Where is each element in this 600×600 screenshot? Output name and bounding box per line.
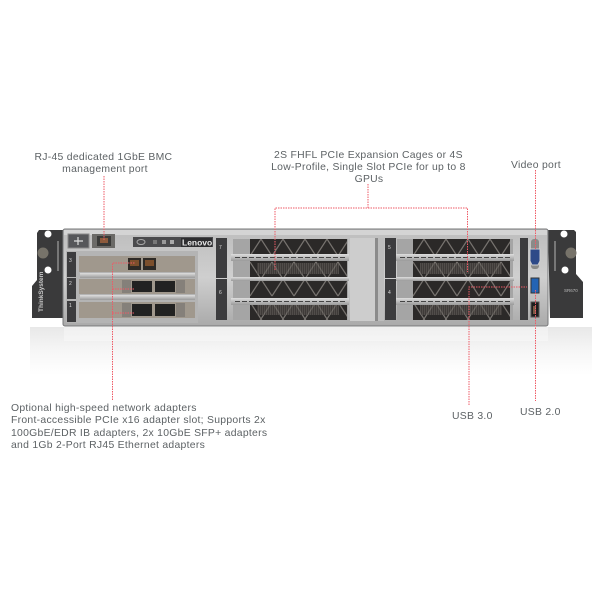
lenovo badge: Lenovo <box>182 238 212 248</box>
chassis body <box>63 229 548 326</box>
centre blank panel <box>350 238 384 321</box>
left rack ear <box>32 230 63 318</box>
label: network adapters: 100GbE/EDR IB adapters, 2x 10GbE SFP+ adapters <box>11 428 267 439</box>
number strip 5 and 4: 4 <box>388 290 391 296</box>
label: RJ-45 port: RJ-45 dedicated 1GbE BMC <box>34 152 173 163</box>
number strip 5 and 4: 5 <box>388 245 391 251</box>
number strip 7 and 6 <box>216 238 227 320</box>
server front panel <box>32 229 583 326</box>
left rack ear: ThinkSystem <box>38 271 45 312</box>
USB 2.0 port <box>531 302 539 317</box>
adapter slots: 1 <box>69 303 72 309</box>
number strip 7 and 6: 7 <box>219 245 222 251</box>
adapter card 2 <box>79 279 195 294</box>
IO strip <box>520 238 540 320</box>
label: PCIe expansion cages: 2S FHFL PCIe Expansion Cages or 4S <box>274 150 463 161</box>
adapter slots: 3 <box>69 258 72 264</box>
adapter card 3 <box>79 256 195 272</box>
number strip 7 and 6: 6 <box>219 290 222 296</box>
number strip 5 and 4 <box>385 238 396 320</box>
label: RJ-45 port: management port <box>62 164 148 175</box>
VGA port <box>530 239 540 269</box>
label: USB 3.0: USB 3.0 <box>452 411 493 422</box>
reflection under server <box>30 327 592 375</box>
label: PCIe expansion cages: Low-Profile, Single Slot PCIe for up to 8 <box>271 162 466 173</box>
right rack ear: SR670 <box>564 288 578 293</box>
label: network adapters: Optional high-speed network adapters <box>11 403 197 414</box>
adapter slots: 2 <box>69 281 72 287</box>
right PCIe cage <box>396 239 514 320</box>
adapter slots <box>66 251 198 323</box>
left PCIe cage <box>231 239 349 320</box>
USB 3.0 port <box>531 278 539 293</box>
lenovo badge <box>133 237 213 248</box>
label: network adapters: and 1Gb 2-Port RJ45 Ethernet adapters <box>11 440 205 451</box>
label: PCIe expansion cages: GPUs <box>355 174 383 185</box>
adapter card 1 <box>79 302 195 318</box>
label: USB 2.0: USB 2.0 <box>520 407 561 418</box>
right rack ear <box>548 230 583 318</box>
top left controls <box>68 234 115 248</box>
label: video port: Video port <box>511 160 561 171</box>
callout lines <box>104 170 536 405</box>
label: network adapters: Front-accessible PCIe x16 adapter slot; Supports 2x <box>11 415 266 426</box>
